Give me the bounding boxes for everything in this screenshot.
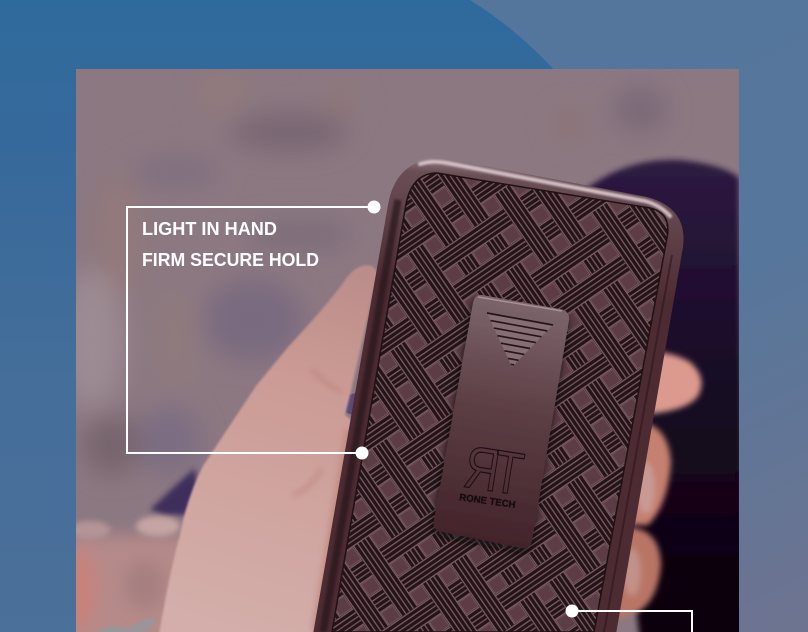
fingernails <box>637 462 655 514</box>
callout: lower right bracket <box>566 604 692 632</box>
callout text: LIGHT IN HAND <box>142 219 277 239</box>
plate top edge highlight <box>478 297 562 311</box>
ring on finger <box>98 617 157 632</box>
callout text: FIRM SECURE HOLD <box>142 250 319 270</box>
darker blue curved shape, left side <box>0 0 556 632</box>
clip plate <box>434 295 569 548</box>
triangle emblem <box>487 313 553 367</box>
dot top <box>368 200 380 214</box>
palm creases <box>294 372 340 496</box>
dot <box>566 604 578 618</box>
callout text <box>142 219 319 270</box>
right hand fingers <box>615 352 702 620</box>
RT logo: T <box>488 437 528 508</box>
finger: upper <box>640 352 702 414</box>
blurred fingers lower left <box>76 512 182 632</box>
right rim shading <box>604 255 672 632</box>
brand name: RONE TECH <box>459 492 516 511</box>
photo panel <box>60 69 745 632</box>
small dark shadow left of palm <box>150 468 200 515</box>
palm and thumb <box>158 265 378 632</box>
left rim shading <box>323 200 398 632</box>
skin shading beside phone <box>318 430 352 632</box>
top rim highlight <box>420 162 670 216</box>
phone body <box>312 158 684 632</box>
purple gap between palm and phone <box>345 393 356 415</box>
finger: lower <box>615 527 661 620</box>
callout: light in hand, firm secure hold <box>127 200 380 460</box>
RT logo: R <box>460 433 505 505</box>
dot bottom <box>356 446 368 460</box>
dark navy clothing <box>585 160 745 632</box>
RT logo <box>463 447 526 494</box>
callout bracket <box>127 207 374 453</box>
phone case <box>312 158 684 632</box>
finger: middle <box>634 421 676 530</box>
blurred pavement background <box>60 70 668 475</box>
woven back pattern <box>332 173 668 632</box>
